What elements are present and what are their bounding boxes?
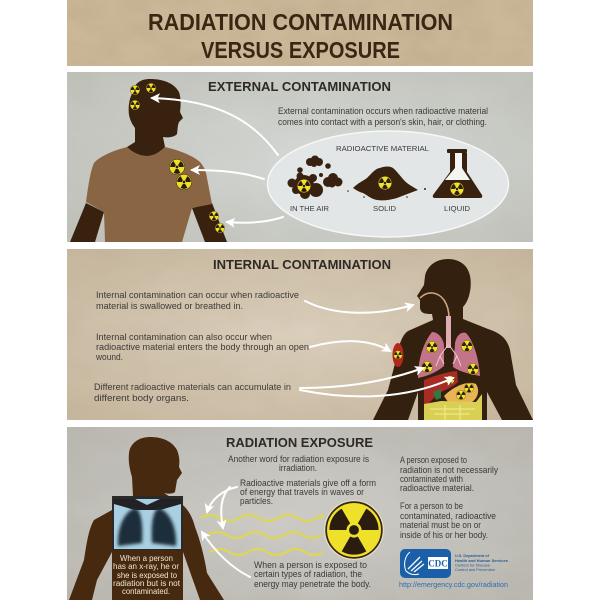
text: not necessarily contaminated: contaminated with — [400, 474, 463, 484]
text: swallowed or breathed: material is swallowed or breathed in. — [96, 301, 243, 311]
arrow: text to body — [202, 532, 250, 577]
text: not necessarily contaminated: radioactive material. — [400, 483, 474, 493]
figure: person in t-shirt — [70, 79, 227, 242]
text: swallowed or breathed: Internal contamination can occur when radioactive — [96, 290, 299, 300]
label: in the air: IN THE AIR — [290, 204, 330, 213]
trachea — [446, 316, 451, 348]
text: external contamination definition — [278, 106, 488, 127]
arrow: text to upper wave — [207, 487, 237, 512]
title: VERSUS EXPOSURE — [201, 37, 400, 63]
radioactive badges in body — [394, 340, 479, 400]
arrow: to mouth — [305, 301, 413, 313]
text: accumulate in organs: different body organs. — [94, 393, 189, 403]
lungs — [418, 332, 480, 378]
text: irradiation: Another word for radiation exposure is — [228, 454, 370, 464]
bronchi — [436, 345, 461, 366]
text: external contamination definition: comes into contact with a person's skin, hair, or clothing. — [278, 117, 487, 127]
text: HHS department: Centers for Disease — [455, 562, 490, 568]
liver — [424, 371, 458, 404]
icon: radiation symbol — [324, 500, 384, 560]
text: HHS department: Health and Human Services — [455, 558, 508, 563]
radioactive badges on person — [130, 83, 225, 233]
heading: radiation exposure: RADIATION EXPOSURE — [226, 435, 373, 450]
text: HHS department: Control and Prevention — [455, 567, 495, 572]
text: irradiation — [228, 454, 370, 473]
label: solid: SOLID — [373, 204, 397, 213]
icon: liquid flask — [433, 149, 482, 198]
heading: external contamination: EXTERNAL CONTAMINATION — [208, 79, 391, 94]
arrow: to liver — [300, 378, 453, 396]
text: accumulate in organs: Different radioactive materials can accumulate in — [94, 382, 291, 392]
arrow: text to middle wave — [221, 487, 230, 528]
intestine — [424, 394, 482, 420]
stomach — [444, 383, 478, 402]
logo: CDC: CDC — [428, 558, 448, 568]
text: irradiation: irradiation. — [279, 463, 317, 473]
text: x-ray caption: When a person — [120, 553, 173, 563]
text: x-ray caption: has an x-ray, he or — [113, 561, 179, 571]
text: HHS department — [455, 553, 508, 572]
text: to be contaminated: For a person to be — [400, 501, 463, 511]
panel: radiation exposure — [67, 427, 533, 600]
airway — [420, 293, 449, 318]
text: waves or particles: Radioactive materials give off a form — [240, 478, 376, 488]
heading: internal contamination: INTERNAL CONTAMINATION — [213, 257, 391, 272]
text: waves or particles — [240, 478, 376, 506]
figure: person with x-ray — [69, 437, 224, 600]
title — [148, 9, 453, 63]
text: energy may penetrate: When a person is exposed to — [254, 560, 367, 570]
text: to be contaminated: contaminated, radioactive — [400, 511, 496, 521]
text: x-ray caption: she is exposed to — [117, 570, 177, 580]
text: waves or particles: of energy that travels in waves or — [240, 487, 364, 497]
text: HHS department: U.S. Department of — [455, 553, 490, 558]
text: not necessarily contaminated: radiation is not necessarily — [400, 465, 499, 475]
x-ray image — [112, 496, 183, 550]
text: to be contaminated — [400, 501, 496, 540]
panel: title banner — [67, 0, 533, 66]
label: liquid: LIQUID — [444, 204, 471, 213]
wound — [392, 343, 404, 367]
text: x-ray caption — [113, 553, 181, 596]
arrow: oval to hair — [152, 98, 278, 155]
panel: internal contamination — [67, 249, 533, 420]
text: not necessarily contaminated: A person exposed to — [400, 455, 467, 465]
text: not necessarily contaminated — [400, 455, 499, 493]
text: x-ray caption: radiation but is not — [113, 578, 181, 588]
link: CDC radiation URL: http://emergency.cdc.gov/radiation — [399, 580, 508, 589]
figure: body silhouette with organs — [373, 259, 533, 420]
logo: CDC — [400, 549, 451, 578]
text: swallowed or breathed — [96, 290, 299, 311]
text: x-ray caption: contaminated. — [122, 586, 170, 596]
title: RADIATION CONTAMINATION — [148, 9, 453, 35]
text: open wound: Internal contamination can also occur when — [96, 332, 272, 342]
panel: external contamination — [67, 72, 533, 242]
arrow: to lung — [300, 368, 423, 388]
text: energy may penetrate: certain types of radiation, the — [254, 569, 362, 579]
gallbladder — [433, 389, 441, 400]
arrow: oval to shirt — [192, 170, 264, 179]
text: open wound — [95, 332, 309, 362]
text: to be contaminated: inside of his or her body. — [400, 530, 488, 540]
text: open wound: radioactive material enters the body through an open — [96, 342, 309, 352]
label: radioactive material: RADIOACTIVE MATERIAL — [336, 144, 429, 153]
text: open wound: wound. — [95, 352, 123, 362]
icon: clouds in the air — [288, 156, 342, 199]
oval: radioactive material — [268, 131, 508, 237]
text: external contamination definition: External contamination occurs when radioactive material — [278, 106, 488, 116]
text: energy may penetrate: energy may penetrate the body. — [254, 579, 371, 589]
text: waves or particles: particles. — [240, 496, 273, 506]
text: accumulate in organs — [94, 382, 291, 403]
text: energy may penetrate — [254, 560, 371, 589]
arrow: to wound — [310, 341, 390, 351]
arrow: oval to arm — [227, 217, 283, 223]
radiation waves — [200, 515, 323, 555]
icon: solid pile — [347, 166, 426, 200]
text: to be contaminated: material must be on or — [400, 520, 481, 530]
